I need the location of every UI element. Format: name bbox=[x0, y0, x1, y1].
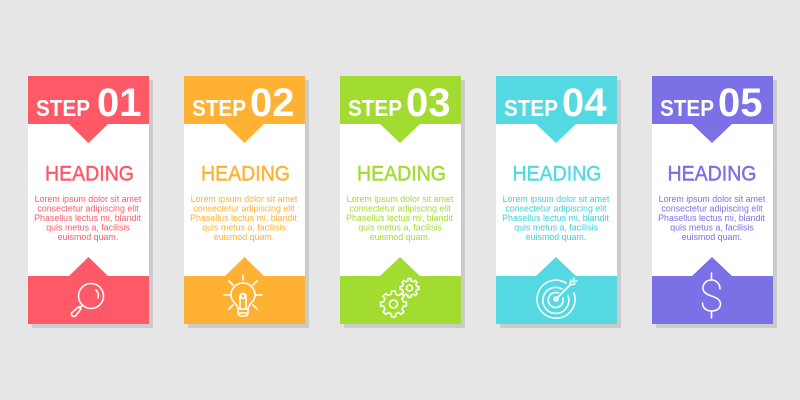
step label 01 bbox=[36, 81, 142, 125]
step label 03 bbox=[348, 81, 450, 125]
panel: step 04 bbox=[496, 76, 621, 328]
text block 01: consectetur adipiscing elit bbox=[37, 204, 139, 214]
text block 04: Lorem ipsum dolor sit amet bbox=[503, 194, 610, 204]
text block 03: Lorem ipsum dolor sit amet bbox=[347, 194, 454, 204]
panel: step 02 bbox=[184, 76, 309, 328]
heading 05: HEADING bbox=[668, 162, 756, 186]
icon: dollar sign bbox=[702, 273, 720, 318]
step label 05 bbox=[660, 81, 762, 125]
step label 04 bbox=[504, 81, 607, 125]
step label 04: STEP bbox=[504, 95, 558, 121]
text block 04: consectetur adipiscing elit bbox=[505, 204, 607, 214]
text block 05: consectetur adipiscing elit bbox=[661, 204, 763, 214]
text block 04: euismod quam. bbox=[526, 232, 586, 242]
text block 05: Phasellus lectus mi, blandit bbox=[658, 213, 765, 223]
text block 03: Phasellus lectus mi, blandit bbox=[346, 213, 453, 223]
heading 04: HEADING bbox=[512, 162, 602, 186]
step label 01: STEP bbox=[36, 95, 90, 121]
step label 03: STEP bbox=[348, 95, 402, 121]
panel: step 01 bbox=[28, 76, 153, 328]
text block 02: euismod quam. bbox=[214, 232, 274, 242]
text block 05: euismod quam. bbox=[682, 232, 742, 242]
text block 02: Lorem ipsum dolor sit amet bbox=[191, 194, 298, 204]
text block 03: euismod quam. bbox=[370, 232, 430, 242]
text block 01: Lorem ipsum dolor sit amet bbox=[35, 194, 142, 204]
heading 01: HEADING bbox=[45, 162, 134, 186]
text block 04 bbox=[502, 194, 610, 242]
step label 02: STEP bbox=[192, 95, 246, 121]
step label 01: 01 bbox=[97, 81, 142, 125]
text block 01: quis metus a, facilisis bbox=[46, 222, 130, 232]
icon: light bulb bbox=[224, 275, 262, 316]
step label 04: 04 bbox=[562, 81, 607, 125]
step label 05: 05 bbox=[718, 81, 762, 125]
icon: gears bbox=[381, 279, 419, 317]
panel: step 05 bbox=[652, 76, 777, 328]
heading 02: HEADING bbox=[201, 162, 290, 186]
text block 01: euismod quam. bbox=[58, 232, 118, 242]
text block 02: quis metus a, facilisis bbox=[202, 222, 286, 232]
text block 03: quis metus a, facilisis bbox=[358, 222, 442, 232]
text block 05: Lorem ipsum dolor sit amet bbox=[659, 194, 766, 204]
text block 01 bbox=[34, 194, 142, 242]
step label 03: 03 bbox=[406, 81, 450, 125]
icon: magnifying glass bbox=[72, 284, 104, 316]
text block 05: quis metus a, facilisis bbox=[670, 222, 754, 232]
text block 05 bbox=[658, 194, 766, 242]
text block 02: Phasellus lectus mi, blandit bbox=[190, 213, 297, 223]
text block 04: Phasellus lectus mi, blandit bbox=[502, 213, 609, 223]
heading 03: HEADING bbox=[357, 162, 446, 186]
step label 05: STEP bbox=[660, 95, 714, 121]
step label 02: 02 bbox=[250, 81, 294, 125]
text block 03: consectetur adipiscing elit bbox=[349, 204, 451, 214]
step label 02 bbox=[192, 81, 294, 125]
panel: step 03 bbox=[340, 76, 465, 328]
text block 03 bbox=[346, 194, 454, 242]
text block 01: Phasellus lectus mi, blandit bbox=[34, 213, 141, 223]
icon: target bbox=[537, 278, 577, 318]
text block 04: quis metus a, facilisis bbox=[514, 222, 598, 232]
text block 02: consectetur adipiscing elit bbox=[193, 204, 295, 214]
text block 02 bbox=[190, 194, 298, 242]
